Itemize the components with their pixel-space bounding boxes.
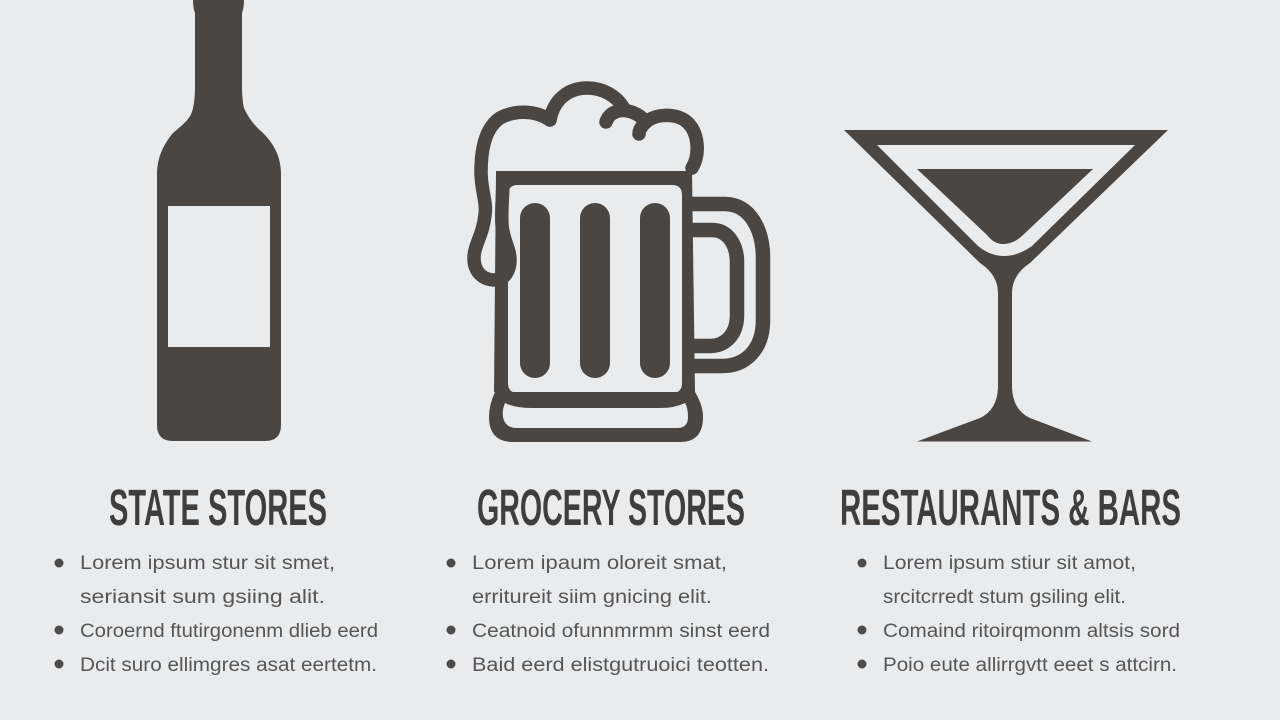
bullet list: restaurants and bars: Poio eute allirrgvtt eeet s attcirn.: [883, 655, 1177, 676]
beer foam: [474, 88, 697, 280]
heading: state stores: STATE STORES: [109, 479, 327, 536]
icon: martini glass: [844, 130, 1168, 442]
bullet list: grocery stores: [446, 553, 770, 676]
bullet list: state stores: Lorem ipsum stur sit smet,: [80, 553, 335, 574]
mug body: [494, 171, 695, 393]
bullet list: state stores: Coroernd ftutirgonenm dlieb eerd: [80, 621, 378, 642]
panel: restaurants and bars: [840, 130, 1181, 676]
bullet list: grocery stores: Ceatnoid ofunnmrmm sinst eerd: [472, 621, 770, 642]
bullet list: state stores: [54, 553, 378, 676]
mug base: [489, 392, 703, 442]
icon: wine bottle: [157, 0, 281, 441]
bullet list: restaurants and bars: srcitcrredt stum gsiling elit.: [883, 587, 1126, 608]
bullet list: restaurants and bars: Lorem ipsum stiur sit amot,: [883, 553, 1136, 574]
icon: beer mug: [474, 88, 763, 442]
bullet list: state stores: Dcit suro ellimgres asat eertetm.: [80, 655, 377, 676]
panel: grocery stores: [446, 88, 770, 676]
bullet list: grocery stores: Lorem ipaum oloreit smat,: [472, 553, 727, 574]
mug bars: [520, 203, 670, 378]
bullet list: state stores: seriansit sum gsiing alit.: [80, 587, 325, 608]
bullet list: restaurants and bars: [858, 553, 1180, 676]
heading: grocery stores: GROCERY STORES: [477, 479, 745, 536]
mug handle: [692, 204, 763, 366]
bullet list: restaurants and bars: Comaind ritoirqmonm altsis sord: [883, 621, 1180, 642]
bullet list: grocery stores: erritureit siim gnicing elit.: [472, 587, 712, 608]
panel: state stores: [54, 0, 378, 676]
bullet list: grocery stores: Baid eerd elistgutruoici teotten.: [472, 655, 769, 676]
